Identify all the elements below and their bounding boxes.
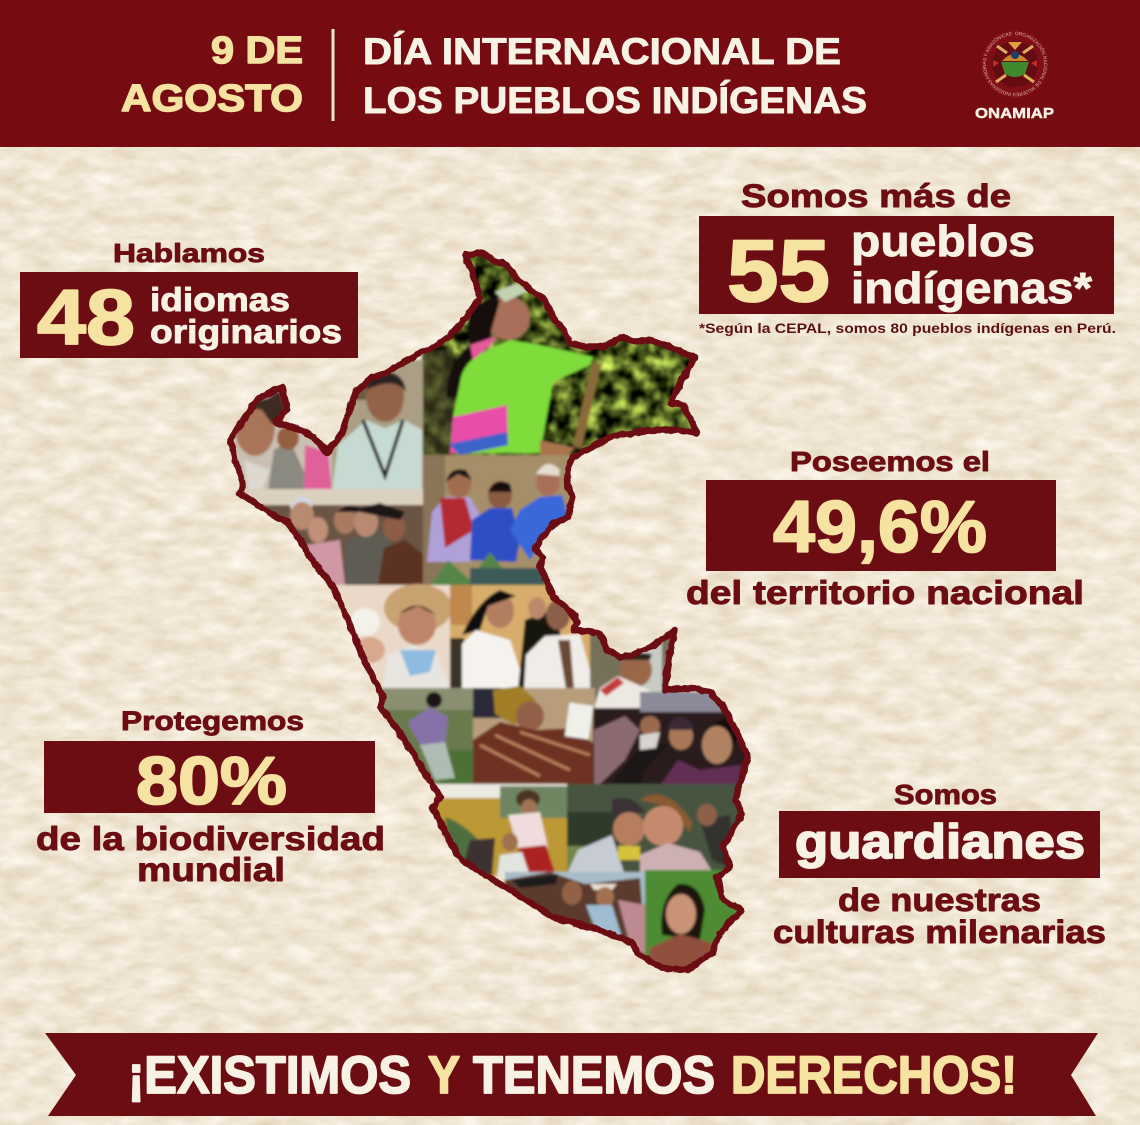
photo: group of women [238, 489, 424, 586]
ONAMIAP logo [975, 32, 1054, 122]
photo: children in traditional dress [593, 692, 753, 786]
callout: 80% biodiversity: 80% [136, 743, 287, 819]
callout: 80% biodiversity: Protegemos [121, 706, 304, 736]
bottom banner: Y [428, 1046, 460, 1105]
photo: smiling woman among green leaves [643, 868, 737, 967]
main title: DÍA INTERNACIONAL DE [363, 31, 841, 72]
ONAMIAP logo: ONAMIAP [975, 106, 1054, 122]
bottom banner: DERECHOS! [731, 1046, 1017, 1105]
photo: man in white and red shirt [590, 628, 680, 713]
callout: 48 languages [20, 238, 358, 361]
callout: guardians [773, 779, 1106, 950]
bottom banner: ¡EXISTIMOS [128, 1046, 411, 1105]
photo: woman with necklace and white blouse [330, 360, 423, 490]
photo: two smiling women [566, 784, 739, 876]
photo: three people with plants [423, 455, 578, 586]
callout: 48 languages: idiomas [150, 281, 290, 318]
photo: people wearing hats [505, 872, 647, 968]
callout: 49,6% territory: Poseemos el [790, 446, 990, 477]
photo: woman in hat writing [473, 686, 595, 786]
photo: woman in green blouse in forest [422, 250, 702, 456]
main title [363, 31, 867, 121]
bottom banner: TENEMOS [473, 1046, 715, 1105]
date heading: AGOSTO [121, 78, 303, 120]
photo mosaic clipped to the map [228, 250, 753, 978]
callout: 49,6% territory [686, 446, 1084, 611]
photo: woman walking in a field [380, 688, 475, 786]
callout: 80% biodiversity: de la biodiversidad [36, 820, 385, 857]
date heading [121, 30, 303, 120]
callout: 49,6% territory: del territorio nacional [686, 574, 1084, 611]
callout: 48 languages: 48 [37, 273, 135, 361]
photo: woman in straw hat with baby [336, 584, 452, 689]
callout: 49,6% territory: 49,6% [773, 487, 987, 568]
photo: women on a yellow stage [430, 784, 568, 876]
main title: LOS PUEBLOS INDÍGENAS [363, 80, 867, 121]
callout: 55 peoples: 55 [727, 221, 830, 320]
photo: women in white shirts [450, 585, 600, 689]
callout: guardians: de nuestras [838, 882, 1041, 918]
bottom banner [45, 1033, 1098, 1116]
callout: 80% biodiversity: mundial [137, 851, 285, 888]
callout: 55 peoples [699, 178, 1116, 336]
callout: guardians: Somos [894, 779, 997, 810]
map outline [230, 253, 748, 970]
date heading: 9 DE [211, 30, 303, 72]
callout: 55 peoples: Somos más de [741, 178, 1011, 214]
callout: 48 languages: originarios [150, 313, 342, 350]
callout: 55 peoples: indígenas* [851, 264, 1093, 313]
callout: guardians: guardianes [795, 816, 1085, 869]
callout: 80% biodiversity [36, 706, 385, 888]
callout: guardians: culturas milenarias [773, 914, 1106, 950]
callout: 55 peoples: pueblos [851, 217, 1035, 266]
callout: 55 peoples: *Según la CEPAL, somos 80 pueblos indígenas en Perú. [699, 321, 1116, 336]
photo: two people at left [234, 392, 334, 490]
callout: 48 languages: Hablamos [113, 238, 265, 268]
header band [0, 0, 1140, 147]
Peru photo map [228, 250, 753, 978]
